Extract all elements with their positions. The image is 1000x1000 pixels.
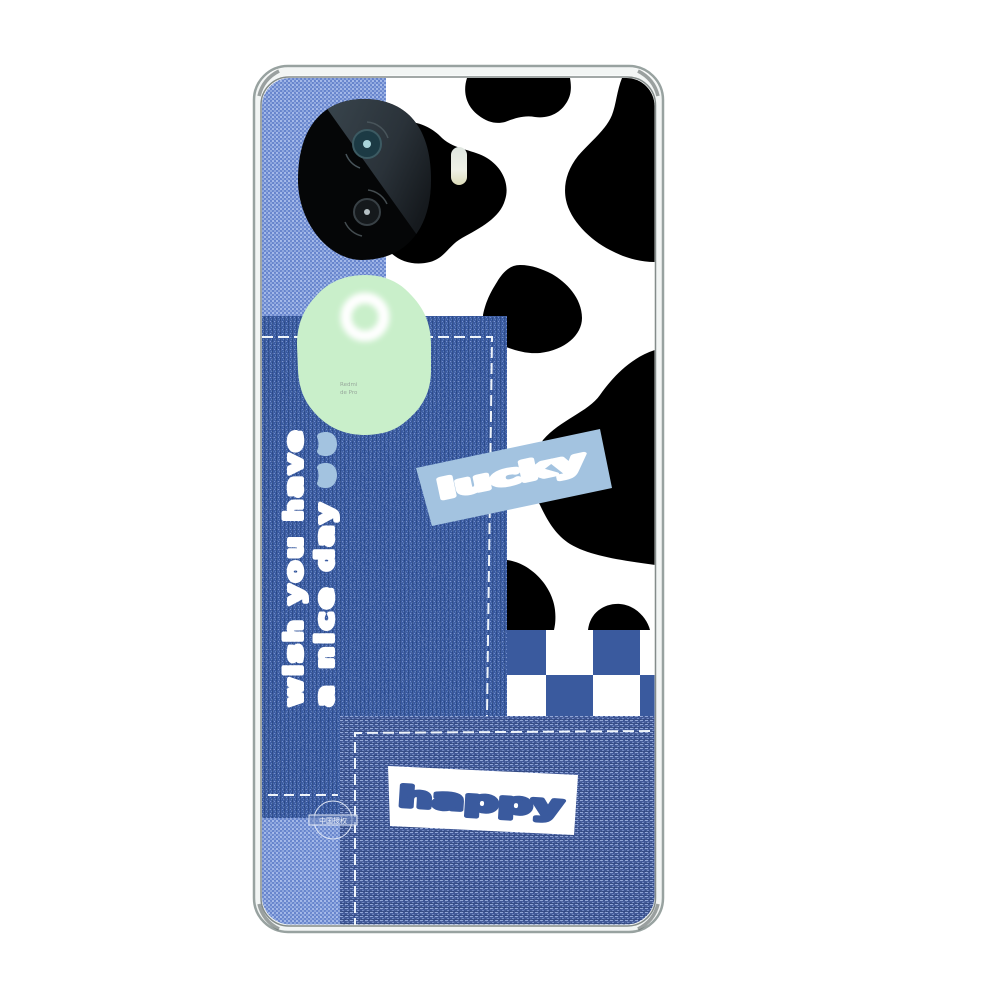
panel: light denim bottom left <box>262 818 340 925</box>
lucky tag: lucky <box>435 445 588 506</box>
denim speckle texture <box>262 78 655 925</box>
lucky tag <box>416 429 612 526</box>
icons: blue hearts <box>317 432 337 488</box>
camera flash <box>451 147 467 185</box>
upper lens <box>346 122 388 168</box>
happy tag: happy <box>398 780 564 823</box>
panel: light denim top left <box>262 78 386 318</box>
stitching: lower left seam <box>268 794 338 796</box>
panel: denim pocket <box>340 716 655 925</box>
tiny model text: Redmi <box>340 382 357 388</box>
happy tag <box>388 766 578 835</box>
phone case back panel <box>262 78 655 925</box>
stitching: pocket <box>355 731 650 925</box>
tiny model text: de Pro <box>340 390 358 396</box>
glossy panel <box>328 99 431 234</box>
panel: dark denim patch <box>262 316 507 818</box>
camera module <box>298 99 431 260</box>
light ring <box>346 298 384 336</box>
lower lens <box>345 190 387 236</box>
vertical text: a nice day: a nice day <box>312 503 339 706</box>
panel: checkerboard <box>507 630 655 716</box>
corner bumpers <box>259 71 658 929</box>
panel: cow print background <box>392 78 654 630</box>
vertical text: wish you have: wish you have <box>281 431 308 706</box>
stitching: dark denim patch <box>262 337 492 716</box>
watermark stamp <box>309 801 357 839</box>
green oval camera island <box>297 275 431 435</box>
watermark stamp: 中国授权 <box>319 816 347 825</box>
clear case frame <box>254 66 663 932</box>
